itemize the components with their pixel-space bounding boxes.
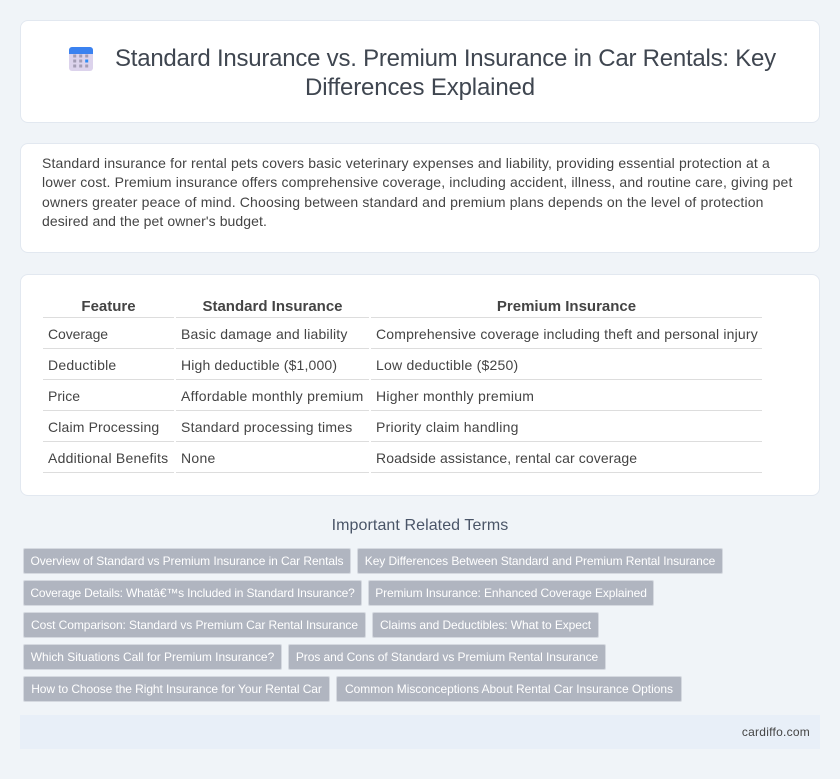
row: Deductible: [48, 357, 518, 373]
text block: intro paragraph: owners greater peace of mind. Choosing between standard and premium plans depends on the level of protection: [42, 194, 764, 210]
row: Additional Benefits: Additional Benefits: [48, 450, 168, 466]
tags: related terms: [23, 548, 723, 702]
row: Coverage: Comprehensive coverage including theft and personal injury: [376, 326, 758, 342]
row: Additional Benefits: None: [181, 450, 216, 466]
row: Claim Processing: Claim Processing: [48, 419, 159, 435]
row: Deductible: High deductible ($1,000): [181, 357, 337, 373]
tag: [357, 548, 723, 574]
heading: page title: Standard Insurance vs. Premium Insurance in Car Rentals: Key: [115, 45, 776, 72]
panel: comparison table: [20, 274, 820, 496]
row: Additional Benefits: Roadside assistance, rental car coverage: [376, 450, 637, 466]
tag: [23, 644, 282, 670]
row: Deductible: Deductible: [48, 357, 116, 373]
row: Deductible: Low deductible ($250): [376, 357, 518, 373]
tag: [23, 612, 366, 638]
tag: Coverage Details: Whatâ€™s Included in Standard Insurance?: [30, 586, 355, 600]
tag: [336, 676, 682, 702]
table header: Standard Insurance: Standard Insurance: [202, 298, 343, 315]
row: Claim Processing: Priority claim handling: [376, 419, 519, 435]
row: Claim Processing: Standard processing times: [181, 419, 353, 435]
text block: intro paragraph: lower cost. Premium insurance offers comprehensive coverage, including accident, illness, and routine care, giving pet: [42, 174, 792, 190]
tag: Which Situations Call for Premium Insurance?: [31, 650, 274, 664]
row: Price: Affordable monthly premium: [181, 388, 364, 404]
tag: [23, 676, 330, 702]
row: Additional Benefits: [48, 450, 637, 466]
heading: important related terms: Important Related Terms: [332, 517, 508, 534]
icon: calendar: [69, 47, 93, 71]
tag: Claims and Deductibles: What to Expect: [380, 618, 591, 632]
text block: intro paragraph: desired and the pet owner's budget.: [42, 213, 267, 229]
text block: intro paragraph: Standard insurance for rental pets covers basic veterinary expenses and liability, providing essential protection at a: [42, 155, 770, 171]
tag: [368, 580, 654, 606]
tag: Common Misconceptions About Rental Car Insurance Options: [345, 682, 673, 696]
row: Claim Processing: [48, 419, 519, 435]
tag: Cost Comparison: Standard vs Premium Car Rental Insurance: [31, 618, 358, 632]
row: Coverage: Coverage: [48, 326, 108, 342]
table header: Premium Insurance: Premium Insurance: [497, 298, 636, 315]
footer: site name: cardiffo.com: [742, 725, 810, 739]
table header: Feature: Feature: [81, 298, 136, 315]
tag: [372, 612, 599, 638]
tag: How to Choose the Right Insurance for Your Rental Car: [31, 682, 322, 696]
row: Coverage: [48, 326, 758, 342]
tag: Premium Insurance: Enhanced Coverage Explained: [375, 586, 647, 600]
row: Price: [48, 388, 534, 404]
tag: Overview of Standard vs Premium Insurance in Car Rentals: [30, 554, 343, 568]
row: Price: Price: [48, 388, 80, 404]
heading: page title: [115, 45, 776, 101]
tag: [23, 580, 362, 606]
tag: [288, 644, 606, 670]
row: Price: Higher monthly premium: [376, 388, 534, 404]
footer bar: [20, 715, 820, 749]
tag: Key Differences Between Standard and Premium Rental Insurance: [365, 554, 715, 568]
tag: Pros and Cons of Standard vs Premium Rental Insurance: [296, 650, 598, 664]
heading: page title: Differences Explained: [305, 74, 535, 101]
tag: [23, 548, 351, 574]
row: Coverage: Basic damage and liability: [181, 326, 348, 342]
panel: intro text: [20, 143, 820, 253]
text block: intro paragraph: [42, 155, 792, 229]
panel: title card: [20, 20, 820, 123]
